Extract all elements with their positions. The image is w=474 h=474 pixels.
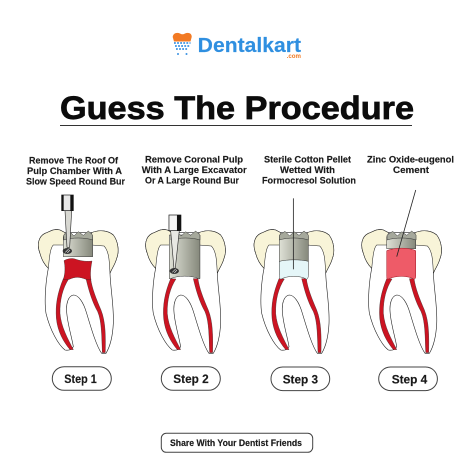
caption: step 1 — [26, 156, 125, 188]
caption: step 2: Or A Large Round Bur — [145, 176, 239, 186]
cotton pellet — [279, 260, 308, 279]
button: step 4 — [379, 367, 437, 391]
brand name: Dentalkart — [198, 35, 301, 57]
button: step 1 — [52, 367, 111, 390]
caption: step 4 — [367, 154, 454, 176]
button: step 2: Step 2 — [173, 372, 209, 386]
caption: step 3 — [262, 154, 356, 186]
caption: step 3: Sterile Cotton Pellet — [264, 154, 352, 166]
title: Guess The Procedure — [60, 90, 414, 126]
icon: large round bur — [169, 215, 181, 274]
wire pointer — [292, 198, 295, 269]
caption: step 2: Remove Coronal Pulp — [145, 154, 243, 166]
tooth: step 4 — [362, 190, 441, 353]
button: share: Share With Your Dentist Friends — [170, 438, 302, 448]
button: step 1: Step 1 — [64, 372, 97, 386]
tooth: step 1 — [38, 195, 118, 353]
caption: step 3: Wetted With — [280, 165, 335, 176]
button: step 3 — [271, 367, 330, 391]
caption: step 4: Cement — [393, 165, 430, 176]
button: step 2 — [161, 367, 220, 390]
logo — [173, 33, 301, 60]
caption: step 4: Zinc Oxide-eugenol — [367, 154, 454, 166]
caption: step 2 — [142, 154, 247, 186]
cement fill — [387, 248, 416, 279]
button: step 4: Step 4 — [392, 372, 428, 386]
caption: step 1: Pulp Chamber With A — [27, 166, 122, 177]
tooth: step 2 — [146, 215, 225, 353]
caption: step 3: Formocresol Solution — [262, 176, 356, 186]
button: step 3: Step 3 — [283, 372, 318, 386]
wire pointer — [397, 190, 416, 257]
tooth: step 3 — [254, 198, 334, 353]
icon: slow speed round bur — [62, 195, 73, 254]
caption: step 1: Slow Speed Round Bur — [26, 176, 125, 188]
caption: step 2: With A Large Excavator — [142, 165, 247, 176]
caption: step 1: Remove The Roof Of — [29, 156, 119, 166]
button: share — [161, 433, 313, 452]
icon: tooth logo — [173, 33, 192, 55]
brand suffix: .com — [287, 53, 301, 60]
